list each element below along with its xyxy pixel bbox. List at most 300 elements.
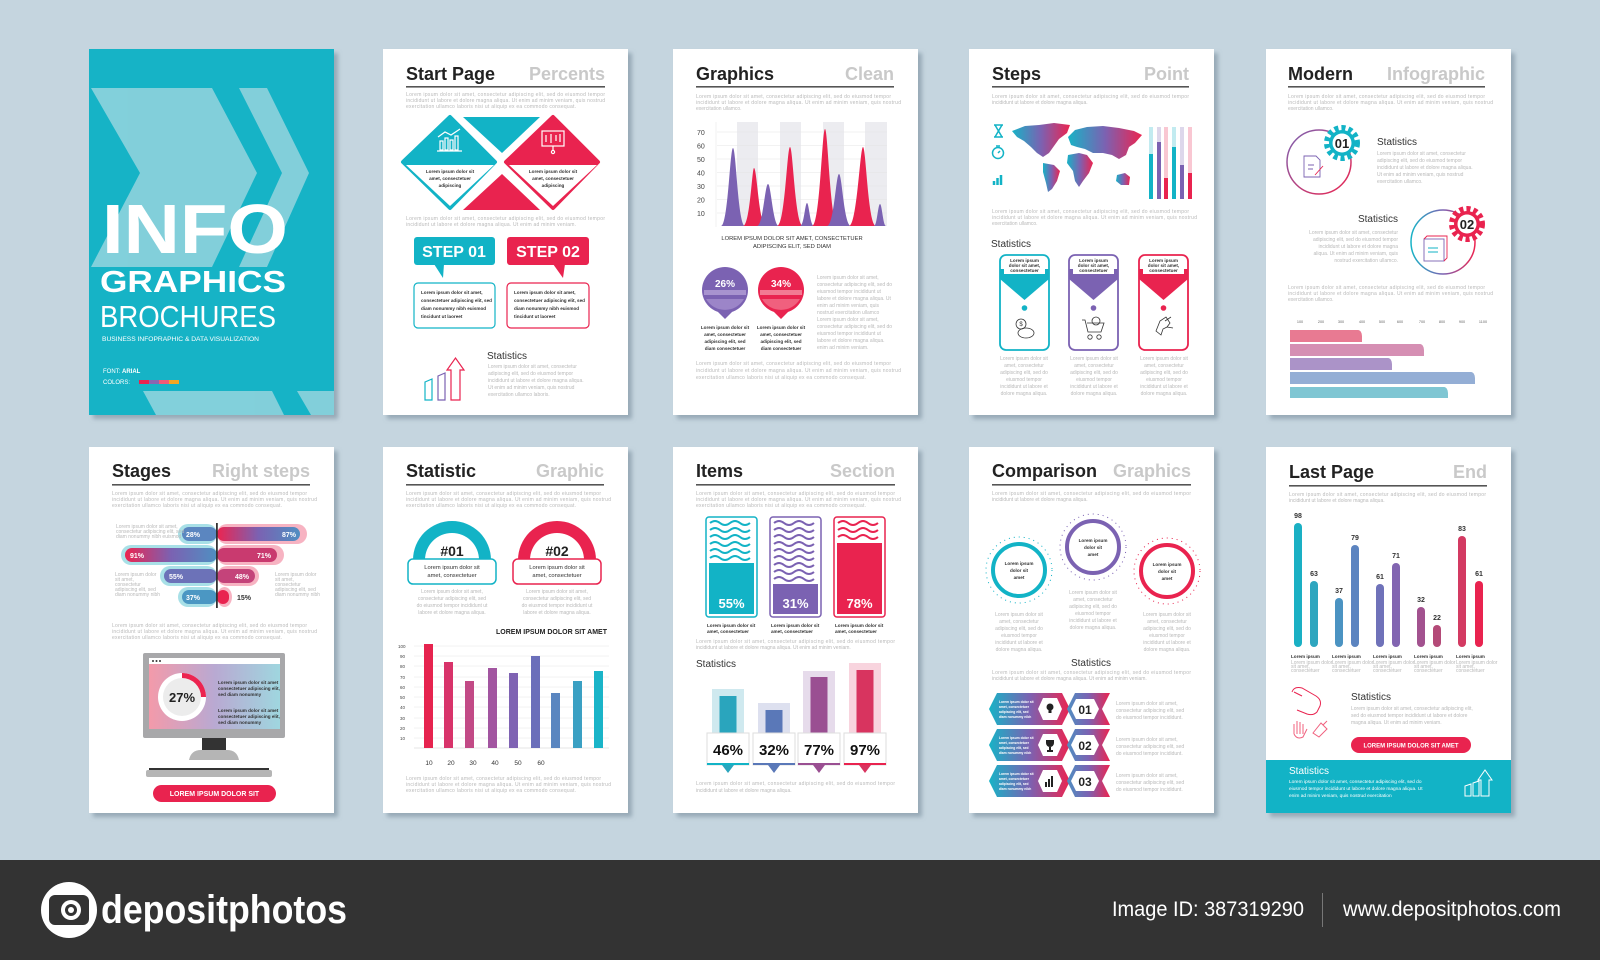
button: LOREM IPSUM DOLOR SIT AMET [1363,744,1459,750]
intro text [406,491,611,509]
intro text: exercitation ullamco laboris nisi ut aliquip ex ea commodo consequat. [696,503,866,509]
intro text: Lorem ipsum dolor sit amet, consectetur adipiscing elit, sed do eiusmod tempor [992,94,1189,100]
side text: nostrud exercitation ullamco [817,310,879,316]
heading: End [1453,462,1487,482]
card texts: adipiscing elit, sed do [1140,370,1188,376]
vertical bar chart: consectetuer [1373,668,1402,674]
text [112,623,317,641]
step 02 callout: Lorem ipsum dolor sit amet, [514,290,576,295]
page: comparison: incididunt ut labore et dolore magna aliqua. Ut enim ad minim veniam. [992,676,1147,682]
card texts: eiusmod tempor [1146,377,1182,383]
page: comparison: adipiscing elit, sed do [1069,604,1117,610]
text [406,216,605,228]
step 01 callout: tincidunt ut laoreet [421,314,463,319]
horizontal bar chart [1290,320,1487,398]
bar chart: 40 [491,760,499,767]
card: purple: dolor sit amet, [1078,263,1109,268]
page: comparison: Lorem ipsum dolor sit amet, [1116,773,1178,779]
side text: labore et dolore magna aliqua. [817,338,885,344]
card: red: Lorem ipsum [1149,258,1178,263]
color swatches [139,380,179,384]
page: comparison: do eiusmod tempor incididunt. [1116,715,1183,721]
vertical bar chart: sit amet, [1373,664,1392,670]
footer band [1266,760,1511,813]
side notes: consectetur adipiscing elit, sed [116,529,184,535]
intro text: exercitation ullamco laboris nisi ut aliquip ex ea commodo consequat. [406,503,576,509]
card: teal: consectetuer [1010,268,1039,273]
bar chart: 10 [400,736,406,741]
heading: Steps [992,64,1041,84]
logo text: depositphotos [101,888,347,932]
heading [696,461,895,486]
side notes: diam nonummy nibh euismod [116,534,182,540]
stage bars: 91% [130,553,145,560]
item 78% [834,517,885,617]
chart caption: ADIPISCING ELIT, SED DIAM [753,244,831,250]
item 31%: 31% [782,596,809,611]
horizontal bar chart: 600 [1397,320,1403,324]
vertical bar chart: 22 [1433,615,1441,622]
heading: Graphic [536,461,604,481]
intro text: Lorem ipsum dolor sit amet, consectetur adipiscing elit, sed do eiusmod tempor [1288,94,1485,100]
page: graphics: Lorem ipsum dolor sit [757,325,806,330]
circle: red: amet [1162,576,1173,581]
statistics 02 text [1309,214,1398,264]
text: exercitation ullamco. [1288,297,1334,303]
text: exercitation ullamco. [992,221,1038,227]
statistics 02 text: adipiscing elit, sed do eiusmod tempor [1313,237,1398,243]
page: cover [89,49,334,415]
horizontal bar chart: 100 [1297,320,1303,324]
page: modern [1266,49,1511,415]
page: graphics: Lorem ipsum dolor sit [701,325,750,330]
footer bar [0,860,1600,960]
page: statistic: consectetur adipiscing elit, sed [523,596,591,602]
intro text: Lorem ipsum dolor sit amet, consectetur adipiscing elit, sed do eiusmod tempor [696,491,895,497]
statistics text: exercitation ullamco laboris. [488,392,550,398]
diamond infographic: adipiscing [439,183,462,188]
hexagon rows: 03 [1078,775,1092,789]
page: comparison [969,447,1214,813]
bar chart: 20 [447,760,455,767]
vertical bar chart: consectetuer [1456,668,1485,674]
vertical bar chart: 61 [1475,571,1483,578]
bar chart: 100 [398,644,406,649]
step 02 callout [507,237,589,328]
stage bars [121,523,307,608]
text: Lorem ipsum dolor sit amet, consectetur adipiscing elit, sed do eiusmod tempor [406,216,605,222]
page: items [673,447,918,813]
circle: purple: Lorem ipsum [1079,538,1107,543]
text: incididunt ut labore et dolore magna aliqua. Ut enim ad minim veniam, quis nostrud [992,215,1197,221]
vertical bar chart: Lorem ipsum dolor [1414,660,1456,666]
heading: Comparison [992,461,1097,481]
image id: Image ID: 387319290 [1112,898,1304,921]
page: comparison: do eiusmod tempor incididunt. [1116,751,1183,757]
statistics 02 text: incididunt ut labore et dolore magna [1318,244,1398,250]
page: graphics: adipiscing elit, sed [760,339,802,344]
heading: Section [830,461,895,481]
step 01 callout [414,237,495,328]
page: statistic: do eiusmod tempor incididunt ut [417,603,488,609]
cover title: BROCHURES [100,299,276,334]
monitor: Lorem ipsum dolor sit amet [218,708,279,713]
card texts: eiusmod tempor [1006,377,1042,383]
page: comparison: eiusmod tempor [1075,611,1111,617]
hexagon rows: adipiscing elit, sed [999,746,1028,750]
page: comparison: Lorem ipsum dolor sit amet, [1116,701,1178,707]
horizontal bar chart: 700 [1419,320,1425,324]
chart caption [721,236,863,250]
page: comparison: incididunt ut labore et [995,640,1043,646]
statistics 01 text: Ut enim ad minim veniam, quis nostrud [1377,172,1464,178]
vertical bar chart: Lorem ipsum [1456,654,1485,659]
vertical bar chart: sit amet, [1291,664,1310,670]
area peak chart: 10 [697,211,705,218]
bar chart [398,644,609,767]
cover title: INFO [102,190,288,268]
website: www.depositphotos.com [1342,898,1561,921]
page: items: Lorem ipsum dolor sit [771,623,820,628]
cover title: COLORS: [103,380,130,386]
page: comparison: amet, consectetur [1147,619,1187,625]
pin: 26%: 26% [715,279,735,290]
vertical bar chart: Lorem ipsum [1373,654,1402,659]
statistics text: Lorem ipsum dolor sit amet, consectetur adipiscing elit, [1351,706,1473,712]
statistics text: incididunt ut labore et dolore magna aliqua. [488,378,584,384]
step 02 callout: tincidunt ut laoreet [514,314,556,319]
statistics heading: Statistics [696,659,736,670]
vertical bars [1149,127,1192,199]
card: purple [1069,255,1118,350]
vertical bar chart: sit amet, [1332,664,1351,670]
page: statistic: labore et dolore magna aliqua. [418,610,486,616]
chart title: LOREM IPSUM DOLOR SIT AMET [496,629,608,636]
footer band: Lorem ipsum dolor sit amet, consectetur adipiscing elit, sed do [1289,779,1422,785]
heading [1289,462,1487,487]
item 01 [1287,128,1357,194]
statistics 01 text: Statistics [1377,137,1417,148]
card: teal: Lorem ipsum [1010,258,1039,263]
vertical bar chart: Lorem ipsum [1332,654,1361,659]
intro text: exercitation ullamco. [1288,106,1334,112]
hexagon rows: adipiscing elit, sed [999,782,1028,786]
statistics text: Statistics [1351,692,1391,703]
pin: 34%: 34% [771,279,791,290]
side notes: Lorem ipsum dolor [115,572,157,578]
intro text: incididunt ut labore et dolore magna aliqua. Ut enim ad minim veniam, quis nostrud [696,497,901,503]
icon: presentation board [542,131,564,154]
bar chart: 20 [400,726,406,731]
page: graphics [673,49,918,415]
bar chart: 70 [400,675,406,680]
intro text [696,94,901,112]
footer band: enim ad minim veniam, quis nostrud exercitation [1289,793,1392,799]
circle: purple [1060,514,1126,580]
bar chart: 50 [514,760,522,767]
page: comparison: dolore magna aliqua. [1070,625,1116,631]
card: red [1139,255,1188,350]
hexagon rows: diam nonummy nibh [999,751,1031,755]
text: Lorem ipsum dolor sit amet, consectetur adipiscing elit, sed do eiusmod tempor [992,209,1189,215]
side notes: adipiscing elit, sed [115,587,156,593]
vertical bar chart: Lorem ipsum dolor [1332,660,1374,666]
heading: Items [696,461,743,481]
hexagon rows: amet, consectetuer [999,777,1030,781]
statistic columns: 46% [713,742,743,759]
statistics 01 text [1377,137,1473,185]
text [696,639,895,651]
stage bars: 71% [257,553,272,560]
intro text: incididunt ut labore et dolore magna aliqua. [992,100,1088,106]
card: teal: dolor sit amet, [1009,263,1040,268]
bar chart: 40 [400,705,406,710]
text: incididunt ut labore et dolore magna aliqua. Ut enim ad minim veniam. [406,222,576,228]
page: statistic: Lorem ipsum dolor sit amet, [421,589,483,595]
item 02 [1411,209,1482,274]
statistics text [487,351,584,398]
card texts: dolore magna aliqua. [1071,391,1117,397]
vertical bar chart: 37 [1335,588,1343,595]
vertical bar chart [1291,513,1498,674]
page: comparison: dolore magna aliqua. [1144,647,1190,653]
vertical bar chart: consectetuer [1414,668,1443,674]
area peak chart: 50 [697,157,705,164]
text: incididunt ut labore et dolore magna aliqua. Ut enim ad minim veniam, quis nostrud [1288,291,1493,297]
card texts: Lorem ipsum dolor sit [1140,356,1189,362]
logo icon [41,882,97,938]
button: LOREM IPSUM DOLOR SIT [170,791,260,798]
page: comparison: consectetur adipiscing elit, sed [1116,744,1184,750]
card texts: Lorem ipsum dolor sit [1070,356,1119,362]
intro text [1289,492,1486,504]
vertical bar chart: consectetuer [1332,668,1361,674]
gauge #02: amet, consectetuer [532,573,582,579]
side notes: Lorem ipsum dolor [275,572,317,578]
page: statistic: do eiusmod tempor incididunt ut [522,603,593,609]
monitor: 27% [169,690,195,705]
statistic columns: 32% [759,742,789,759]
side text: eiusmod tempor incididunt ut [817,331,882,337]
page: comparison: eiusmod tempor [1001,633,1037,639]
pin: 34% [758,267,804,319]
circle: red: dolor sit [1158,569,1177,574]
heading [406,64,605,88]
statistic columns [707,663,886,773]
statistics text [1351,692,1473,726]
step 02 callout: diam nonummy nibh euismod [514,306,579,311]
vertical bar chart: 79 [1351,535,1359,542]
circle: purple: dolor sit [1084,545,1103,550]
card texts: dolore magna aliqua. [1141,391,1187,397]
side notes: sit amet, [115,577,134,583]
diamond infographic: amet, consectetuer [429,176,471,181]
page: comparison: adipiscing elit, sed do [1143,626,1191,632]
button [153,785,276,802]
bottom text [696,781,895,794]
page: comparison: Lorem ipsum dolor sit [1143,612,1192,618]
circle: teal: amet [1014,575,1025,580]
pin: 26% [702,267,748,319]
hexagon rows: diam nonummy nibh [999,787,1031,791]
step 01 callout: STEP 01 [422,244,486,261]
icons column [992,125,1004,185]
heading: Right steps [212,461,310,481]
step 02 callout: consectetuer adipiscing elit, sed [514,298,585,303]
statistics text: adipiscing elit, sed do eiusmod tempor [488,371,573,377]
footer band: eiusmod tempor incididunt ut labore et dolore magna aliqua. Ut [1289,786,1423,792]
statistics text: Lorem ipsum dolor sit amet, consectetur [488,364,577,370]
cover title [100,190,288,386]
intro text: incididunt ut labore et dolore magna aliqua. [1289,498,1385,504]
step 01 callout: diam nonummy nibh euismod [421,306,486,311]
side notes: Lorem ipsum dolor sit amet, [116,524,178,530]
statistics 01 text: Lorem ipsum dolor sit amet, consectetur [1377,151,1466,157]
diamond infographic: adipiscing [542,183,565,188]
heading [992,64,1189,88]
side text: Lorem ipsum dolor sit amet, [817,275,879,281]
bottom text: Lorem ipsum dolor sit amet, consectetur adipiscing elit, sed do eiusmod tempor [696,361,891,367]
vertical bar chart: Lorem ipsum dolor [1456,660,1498,666]
card: red: dolor sit amet, [1148,263,1179,268]
bar chart: 90 [400,654,406,659]
circle: red [1134,538,1200,604]
statistics text: Ut enim ad minim veniam, quis nostrud [488,385,575,391]
step 02 callout: STEP 02 [516,244,580,261]
gauge #01: Lorem ipsum dolor sit [424,565,480,571]
bar chart: 10 [425,760,433,767]
side text: consectetur adipiscing elit, sed do [817,282,892,288]
card texts: Lorem ipsum dolor sit [1000,356,1049,362]
heading: Stages [112,461,171,481]
cover title: BUSINESS INFOPRAPHIC & DATA VISUALIZATION [102,336,259,343]
side notes: diam nonummy nibh [115,592,160,598]
text: Lorem ipsum dolor sit amet, consectetur adipiscing elit, sed do eiusmod tempor [112,623,307,629]
vertical bar chart: 32 [1417,597,1425,604]
side notes: consectetur [115,582,141,588]
diamond infographic: Lorem ipsum dolor sit [529,169,578,174]
hexagon rows: amet, consectetuer [999,741,1030,745]
intro text: Lorem ipsum dolor sit amet, consectetur adipiscing elit, sed do eiusmod tempor [992,491,1191,497]
area peak chart: 20 [697,198,705,204]
hexagon rows: Lorem ipsum dolor sit [999,736,1035,740]
side text: consectetur adipiscing elit, sed do [817,324,892,330]
statistics text: Statistics [487,351,527,362]
statistics heading: Statistics [1071,658,1111,669]
cover title: FONT: ARIAL [103,369,141,375]
bottom text: Lorem ipsum dolor sit amet, consectetur adipiscing elit, sed do eiusmod tempor [406,776,601,782]
side notes: diam nonummy nibh [275,592,320,598]
card: purple: Lorem ipsum [1079,258,1108,263]
vertical bar chart: sit amet, [1414,664,1433,670]
page: statistic: Lorem ipsum dolor sit amet, [526,589,588,595]
card texts: incididunt ut labore et [1070,384,1118,390]
area peak chart: 60 [697,144,705,150]
intro text: Lorem ipsum dolor sit amet, consectetur adipiscing elit, sed do eiusmod tempor [406,491,601,497]
vertical bar chart: 63 [1310,571,1318,578]
heading: Infographic [1387,64,1485,84]
icon: growth bars [425,358,464,400]
heading: Percents [529,64,605,84]
intro text: exercitation ullamco laboris nisi ut aliquip ex ea commodo consequat. [406,104,576,110]
side text [817,275,892,351]
card texts: amet, consectetur [1144,363,1184,369]
bar chart: 60 [537,760,545,767]
statistics 01 text: incididunt ut labore et dolore magna aliqua. [1377,165,1473,171]
vertical bar chart: consectetuer [1291,668,1320,674]
heading: Last Page [1289,462,1374,482]
intro text: incididunt ut labore et dolore magna aliqua. Ut enim ad minim veniam, quis nostrud [1288,100,1493,106]
intro text [112,491,317,509]
bar chart: 60 [400,685,406,690]
bar chart: 30 [400,716,406,721]
page: comparison: do eiusmod tempor incididunt. [1116,787,1183,793]
page: comparison: adipiscing elit, sed do [995,626,1043,632]
side text: enim ad minim veniam. [817,345,868,351]
intro text [992,94,1189,106]
horizontal bar chart: 1100 [1479,320,1487,324]
horizontal bar chart: 500 [1379,320,1385,324]
vertical bar chart: Lorem ipsum dolor [1291,660,1333,666]
gauge #01: amet, consectetuer [427,573,477,579]
page: comparison: Lorem ipsum dolor sit [995,612,1044,618]
intro text: incididunt ut labore et dolore magna aliqua. [992,497,1088,503]
circle: teal: Lorem ipsum [1005,561,1033,566]
intro text [1288,94,1493,112]
statistics 01 text: exercitation ullamco. [1377,179,1423,185]
statistics 01 text: adipiscing elit, sed do eiusmod tempor [1377,158,1462,164]
stage bars: 15% [237,595,252,602]
gauge #01: #01 [440,543,464,559]
diamond infographic: amet, consectetuer [532,176,574,181]
hexagon rows: 02 [1078,739,1092,753]
page: statistic: labore et dolore magna aliqua. [523,610,591,616]
cover title: GRAPHICS [100,264,286,299]
statistic columns: 77% [804,742,834,759]
hexagon rows: Lorem ipsum dolor sit [999,700,1035,704]
area peak chart [697,122,887,227]
heading: Clean [845,64,894,84]
card texts: incididunt ut labore et [1140,384,1188,390]
page: comparison: consectetur adipiscing elit, sed [1116,780,1184,786]
page: statistic: consectetur adipiscing elit, sed [418,596,486,602]
bottom text: Lorem ipsum dolor sit amet, consectetur adipiscing elit, sed do eiusmod tempor [696,781,895,787]
item 01: 01 [1335,136,1349,151]
hexagon rows: Lorem ipsum dolor sit [999,772,1035,776]
step 01 callout: Lorem ipsum dolor sit amet, [421,290,483,295]
card: teal: $ [1019,322,1023,328]
heading: Graphics [1113,461,1191,481]
gauge #02 [513,521,601,584]
vertical bar chart: 61 [1376,574,1384,581]
page: comparison: Lorem ipsum dolor sit amet, [1116,737,1178,743]
item 31% [770,517,821,617]
card: purple: consectetuer [1079,268,1108,273]
gauge #02: #02 [545,543,569,559]
intro text: incididunt ut labore et dolore magna aliqua. Ut enim ad minim veniam, quis nostrud [112,497,317,503]
page: start page [383,49,628,415]
step 01 callout: consectetuer adipiscing elit, sed [421,298,492,303]
item 02: 02 [1460,217,1474,232]
vertical bar chart: Lorem ipsum [1414,654,1443,659]
card texts: amet, consectetur [1074,363,1114,369]
vertical bar chart: Lorem ipsum [1291,654,1320,659]
text: incididunt ut labore et dolore magna aliqua. Ut enim ad minim veniam, quis nostrud [112,629,317,635]
area peak chart: 70 [697,130,705,137]
page: comparison: consectetur adipiscing elit, sed [1116,708,1184,714]
page: graphics: adipiscing elit, sed [704,339,746,344]
statistic columns: 97% [850,742,880,759]
